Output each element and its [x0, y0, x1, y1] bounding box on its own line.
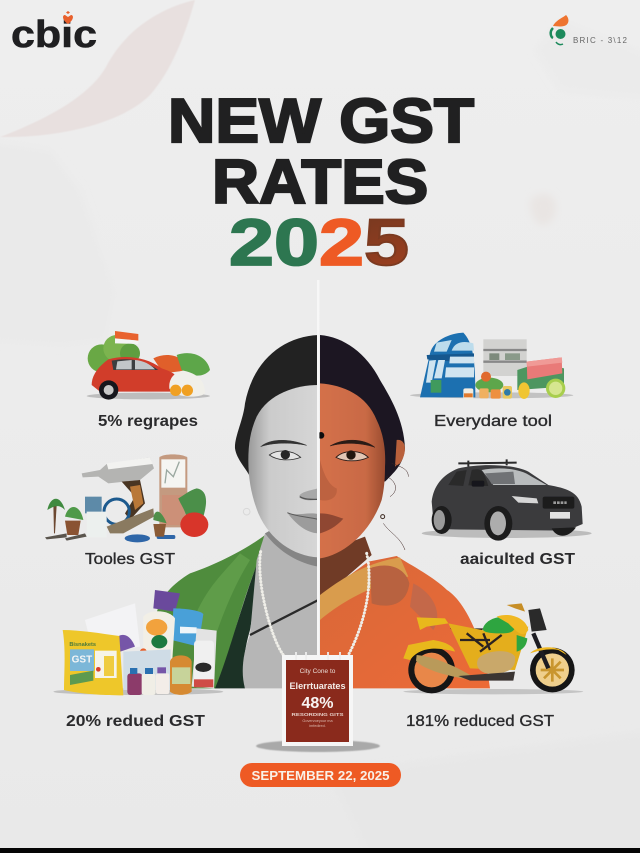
icon: store and groceries [410, 333, 573, 400]
BRIC label: BRIC - 3\12 [573, 36, 628, 45]
icon: product packages: Bisnakets [69, 642, 96, 648]
title: RATES [212, 147, 428, 217]
icon: tools and plants [45, 454, 208, 542]
title [168, 86, 474, 279]
logo: BRIC [551, 15, 628, 45]
left neck [250, 533, 318, 635]
title year: 2025 [229, 205, 409, 279]
icon: black SUV [422, 459, 592, 541]
logo: cbic: cbic [11, 14, 97, 56]
icon: BRIC emblem [551, 15, 568, 45]
right neck [320, 537, 372, 600]
icon: product packages [53, 590, 223, 695]
right hair [320, 335, 405, 482]
label: Everydare tool: Everydare tool [434, 413, 552, 430]
label: 181% reduced GST: 181% reduced GST [406, 713, 554, 730]
label: Tooles GST: Tooles GST [85, 551, 175, 568]
callout: calendar note: imfedired. [309, 724, 326, 728]
callout: calendar note: 48% [301, 695, 334, 712]
calendar shadow [256, 740, 380, 752]
bottom black bar [0, 848, 640, 853]
icon: logo heart [63, 11, 73, 24]
necklace [260, 552, 369, 655]
title: NEW GST [168, 86, 474, 156]
callout: calendar note [256, 652, 380, 752]
right sari [320, 556, 490, 688]
icon: product packages: GST [72, 655, 92, 666]
callout: calendar note: Elerrtuarates [290, 681, 346, 692]
portrait: split woman [157, 335, 490, 688]
label: aaiculted GST: aaiculted GST [460, 551, 575, 568]
date pill [240, 763, 401, 787]
icon: red car with vegetables [87, 331, 210, 400]
date pill: SEPTEMBER 22, 2025 [252, 769, 390, 783]
label: 5% regrapes: 5% regrapes [98, 413, 198, 430]
left hair [235, 335, 318, 480]
left sari gray [243, 602, 318, 688]
divider line [317, 280, 319, 656]
left sari green [157, 535, 265, 688]
left face [248, 385, 318, 557]
callout: calendar note: Govervoeyour ma [302, 719, 333, 723]
right sari border [320, 557, 408, 620]
callout: calendar note: RESORDING GITS [292, 712, 344, 718]
label: 20% redued GST: 20% redued GST [66, 713, 205, 730]
right face [320, 383, 385, 558]
callout: calendar note: City Cone to [300, 668, 336, 675]
icon: yellow motorcycle [403, 603, 583, 694]
